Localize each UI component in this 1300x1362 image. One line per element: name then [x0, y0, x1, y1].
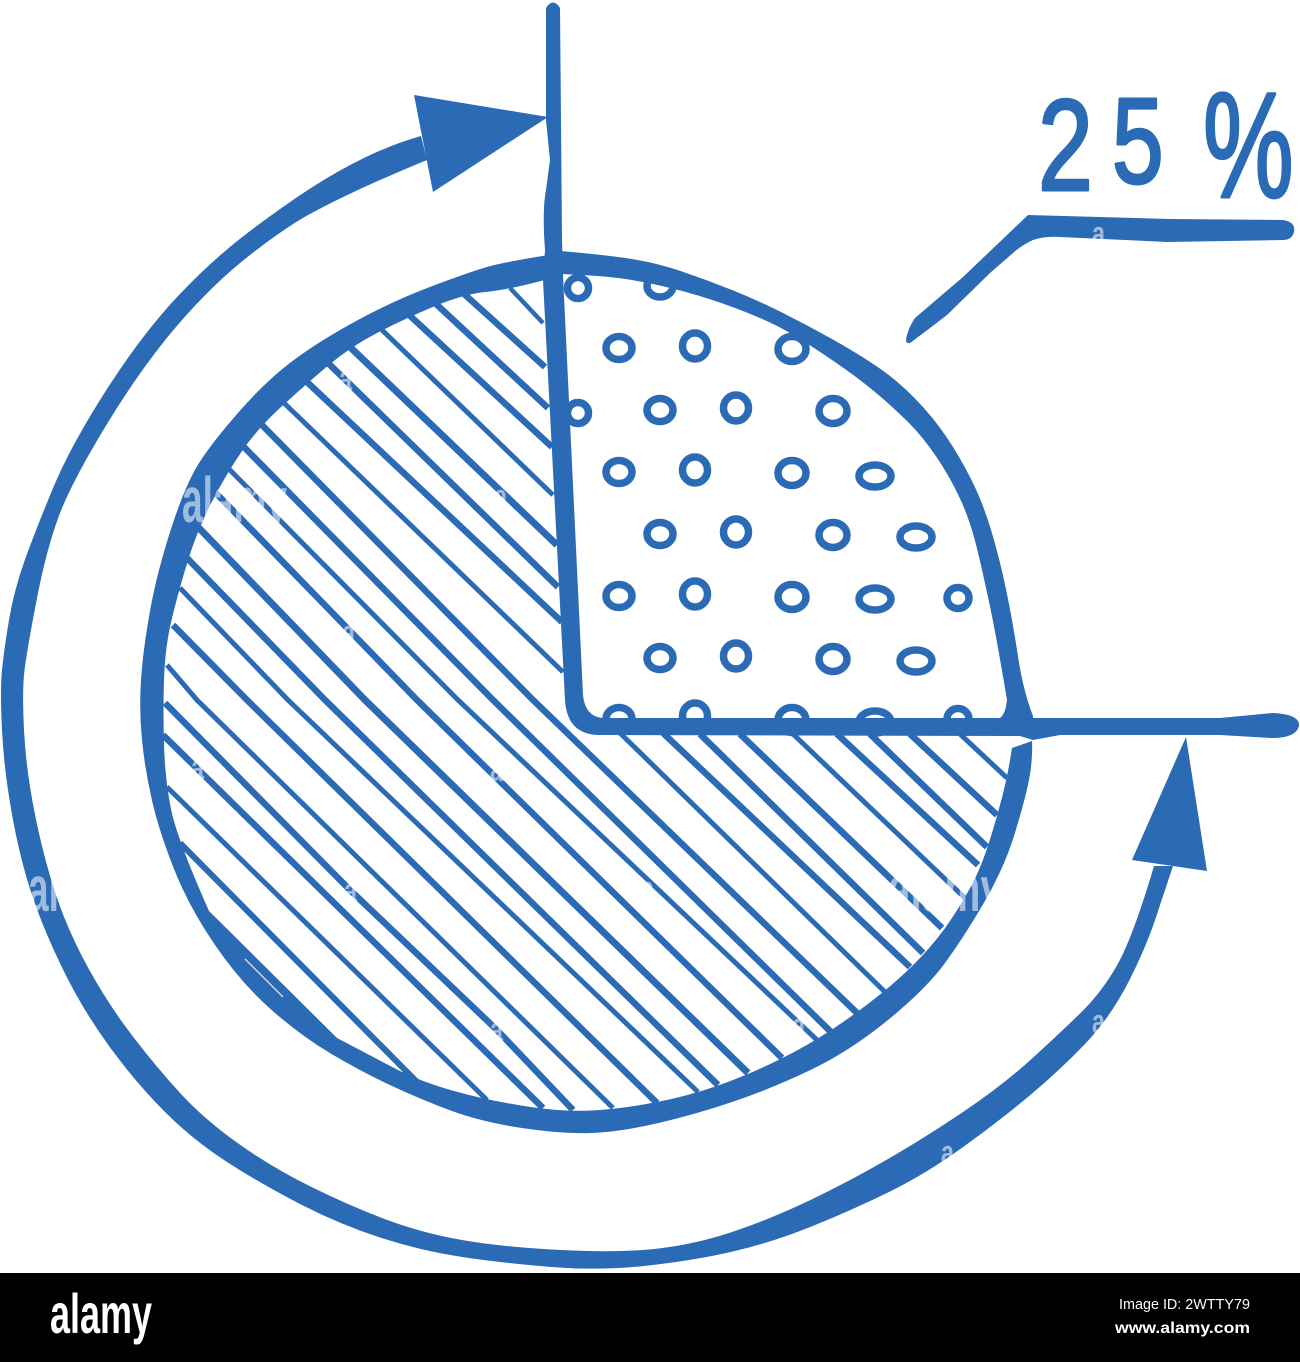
footer url: www.alamy.com [1114, 1320, 1250, 1337]
arrowhead: top [414, 95, 548, 192]
watermark: alamy [28, 853, 133, 925]
watermark: a [641, 870, 655, 908]
watermark: a [344, 872, 358, 910]
watermark: a [1092, 1003, 1106, 1041]
leader line to the 25 percent label [906, 215, 1294, 343]
watermark: a [494, 478, 508, 516]
watermark: alamy [182, 464, 287, 536]
watermark: a [191, 749, 205, 787]
dot pattern: 25 percent pie slice [568, 275, 969, 733]
footer logo: alamy [50, 1282, 152, 1345]
label: 25 percent: 2 [1038, 73, 1093, 218]
watermark: alamy [888, 853, 1003, 925]
arrow: sweep around the pie [1, 95, 1207, 1269]
watermark: a [941, 1134, 955, 1172]
pie outline: 75 percent slice [140, 254, 1032, 1133]
label: 25 percent [1038, 63, 1294, 230]
watermark: a [792, 1007, 806, 1045]
label: 25 percent: 5 [1112, 73, 1164, 209]
arrowhead: right [1132, 737, 1207, 871]
footer image id: Image ID: 2WTTY79 [1119, 1296, 1250, 1313]
watermark: a [490, 1011, 504, 1049]
footer bar [0, 1273, 1300, 1362]
hatching: 75 percent pie slice [163, 288, 1007, 1110]
watermark: a [490, 751, 504, 789]
watermark [28, 215, 1106, 1172]
sliver inside the thick stroke [245, 959, 283, 997]
watermark: a [1092, 215, 1106, 253]
watermark: a [339, 360, 353, 398]
watermark: a [342, 614, 356, 652]
pie outline: 25 percent slice arc [560, 251, 1033, 735]
axis lines: vertical spine and horizontal baseline [543, 2, 1299, 740]
label: 25 percent: % [1203, 63, 1294, 230]
